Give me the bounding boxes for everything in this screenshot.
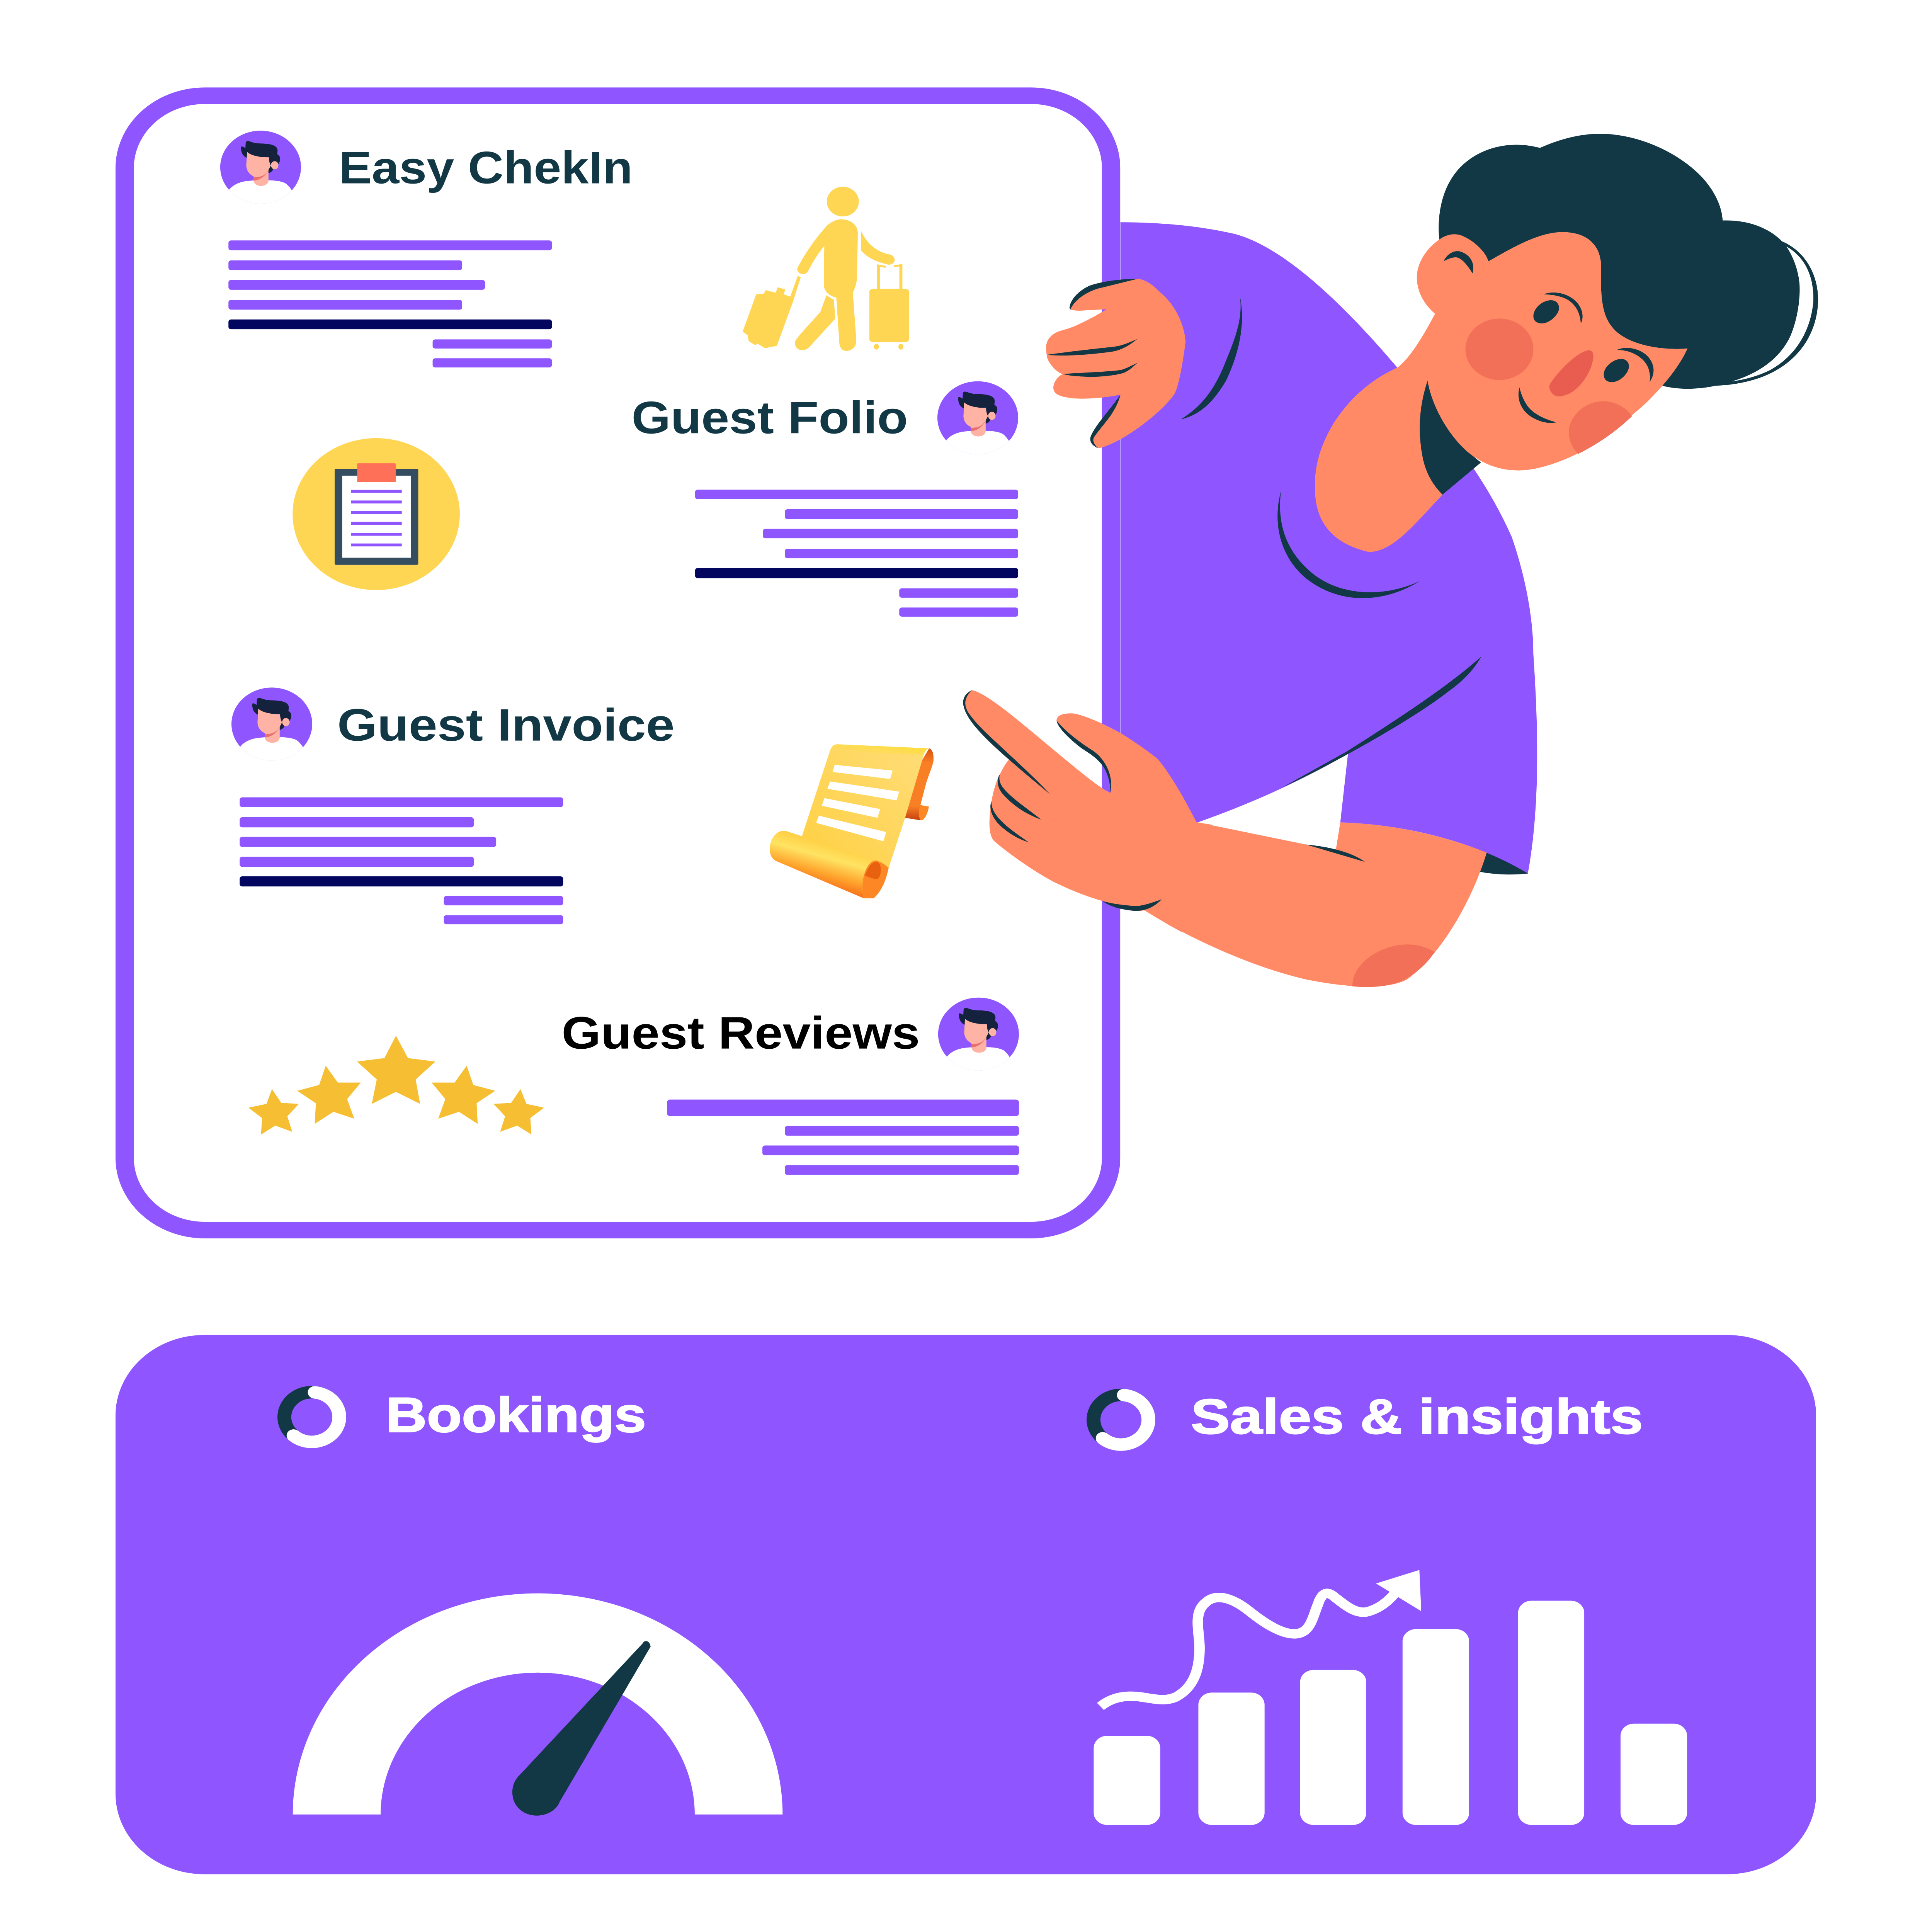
- forearm: [1141, 822, 1487, 987]
- avatar: easy check-in: [220, 131, 301, 205]
- seam line on card edge: [1120, 223, 1121, 848]
- gauge needle: [512, 1641, 651, 1816]
- icon: clipboard: [293, 438, 460, 590]
- heading: Bookings: Bookings: [386, 1387, 646, 1442]
- hair: [1439, 134, 1818, 389]
- character: person peeking from behind card: [963, 134, 1818, 987]
- bar chart: [1094, 1601, 1687, 1825]
- shirt and torso: [1120, 222, 1537, 874]
- heading: Guest Invoice: Guest Invoice: [337, 699, 675, 750]
- trend arrow: [1100, 1570, 1421, 1706]
- text lines: guest reviews: [667, 1100, 1019, 1175]
- text lines: guest folio: [695, 490, 1018, 617]
- section: easy check-in: [220, 131, 909, 367]
- heading: Sales & insights: Sales & insights: [1191, 1389, 1643, 1444]
- head: [1413, 134, 1818, 495]
- heading: Easy ChekIn: Easy ChekIn: [339, 142, 633, 193]
- section: guest reviews: [248, 998, 1019, 1175]
- icon: traveller with suitcases: [743, 187, 909, 351]
- avatar: guest reviews: [938, 998, 1019, 1072]
- text lines: easy check-in: [228, 240, 552, 367]
- icon: bookings ring: [284, 1392, 339, 1442]
- heading: Guest Reviews: Guest Reviews: [561, 1008, 920, 1058]
- gauge chart: [293, 1594, 782, 1816]
- section: guest folio: [293, 381, 1018, 617]
- collar: [1420, 381, 1481, 495]
- section: bookings: [284, 1387, 782, 1816]
- pointing hand: [963, 690, 1211, 932]
- section: guest invoice: [231, 687, 934, 924]
- avatar: guest invoice: [231, 687, 312, 762]
- icon: sales ring: [1094, 1395, 1148, 1444]
- panel: guest profile card: [125, 96, 1111, 1230]
- icon: five stars: [248, 1036, 544, 1134]
- avatar: guest folio: [937, 381, 1018, 456]
- heading: Guest Folio: Guest Folio: [631, 392, 908, 443]
- icon: receipt scroll: [770, 744, 934, 898]
- face: [1413, 232, 1687, 470]
- upper hand gripping card: [1046, 279, 1185, 448]
- panel: bookings and sales: [116, 1335, 1816, 1874]
- text lines: guest invoice: [240, 797, 563, 924]
- section: sales and insights: [1094, 1389, 1687, 1825]
